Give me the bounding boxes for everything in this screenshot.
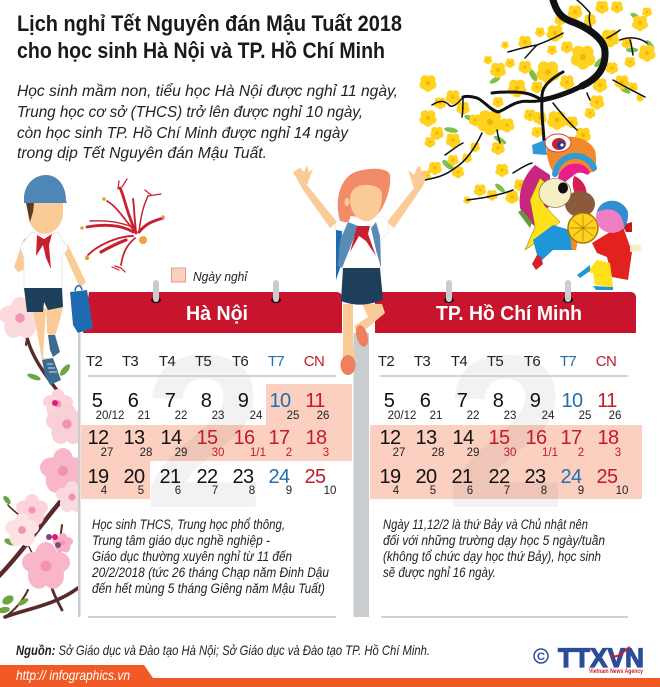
weekday row: T6 xyxy=(232,353,248,370)
panel: TP. Hồ Chí Minh calendar: 2 xyxy=(445,311,567,554)
illustration: cherry blossom branch xyxy=(0,297,78,619)
date grid: 9 xyxy=(578,485,584,497)
date grid: 11 xyxy=(597,390,617,412)
date grid: 13 xyxy=(415,427,437,449)
weekday row xyxy=(86,353,336,377)
date grid: 25 xyxy=(579,410,591,422)
note: TP. Hồ Chí Minh: Ngày 11,12/2 là thứ Bảy và Chủ nhật nên xyxy=(383,517,588,532)
calendar header: Hà Nội xyxy=(83,292,342,333)
weekday row: T2 xyxy=(378,353,394,370)
date grid: 11 xyxy=(305,390,325,412)
date grid: 21 xyxy=(138,410,150,422)
note: Hà Nội: Trung tâm giáo dục nghề nghiệp - xyxy=(92,533,270,548)
date grid: 14 xyxy=(452,427,474,449)
binder rings xyxy=(444,280,573,303)
note: Hà Nội: 20/2/2018 (tức 26 tháng Chạp năm Đinh Dậu xyxy=(91,565,329,580)
date grid: 9 xyxy=(530,390,541,412)
panel: Hà Nội calendar: 2 xyxy=(143,311,265,554)
date grid: 2 xyxy=(578,447,584,459)
date grid: 16 xyxy=(525,427,547,449)
date grid: 5 xyxy=(138,485,144,497)
date grid: 20/12 xyxy=(388,410,416,422)
date grid: 8 xyxy=(249,485,255,497)
footer bar xyxy=(0,665,660,687)
date grid: 21 xyxy=(430,410,442,422)
weekday row: T7 xyxy=(560,353,576,370)
date grid: 9 xyxy=(238,390,249,412)
date grid: 17 xyxy=(268,427,290,449)
date grid: 29 xyxy=(467,447,479,459)
date grid: 6 xyxy=(420,390,431,412)
date grid: 6 xyxy=(128,390,139,412)
weekday row: CN xyxy=(596,353,616,370)
date grid: 8 xyxy=(201,390,212,412)
weekday row: T6 xyxy=(524,353,540,370)
date grid: 19 xyxy=(379,466,401,488)
note: Hà Nội: Giáo dục thường xuyên nghỉ từ 11 đến xyxy=(92,549,292,564)
date grid: 28 xyxy=(432,447,444,459)
legend: holiday xyxy=(172,268,248,284)
date grid: 25 xyxy=(596,466,618,488)
date grid: 28 xyxy=(140,447,152,459)
date grid: 24 xyxy=(268,466,290,488)
weekday row: T2 xyxy=(86,353,102,370)
date grid: 29 xyxy=(175,447,187,459)
illustration: yellow apricot branch xyxy=(419,0,656,204)
date grid: 22 xyxy=(175,410,187,422)
date grid: 22 xyxy=(467,410,479,422)
date grid: 7 xyxy=(457,390,468,412)
date grid: 18 xyxy=(597,427,619,449)
panel: TP. Hồ Chí Minh calendar xyxy=(354,280,642,618)
weekday row: T7 xyxy=(268,353,284,370)
weekday row: CN xyxy=(304,353,324,370)
illustration: boy student xyxy=(14,175,93,385)
intro text: Học sinh mầm non, tiểu học Hà Nội được nghỉ 11 ngày, xyxy=(17,82,398,100)
calendar header: TP. Hồ Chí Minh: TP. Hồ Chí Minh xyxy=(436,303,582,325)
footer bar: http:// infographics.vn xyxy=(16,667,130,683)
weekday row: T3 xyxy=(122,353,138,370)
date grid: 20/12 xyxy=(96,410,124,422)
date grid: 3 xyxy=(323,447,329,459)
date grid: 23 xyxy=(504,410,516,422)
date grid: 16 xyxy=(233,427,255,449)
date grid: 13 xyxy=(123,427,145,449)
date grid: 8 xyxy=(493,390,504,412)
date grid: 20 xyxy=(123,466,145,488)
date grid: 22 xyxy=(196,466,218,488)
illustration: lion dance children xyxy=(518,134,642,290)
date grid: 19 xyxy=(87,466,109,488)
weekday row: T4 xyxy=(159,353,175,370)
date grid xyxy=(87,390,336,497)
date grid: 24 xyxy=(560,466,582,488)
date grid: 5 xyxy=(430,485,436,497)
weekday row: T5 xyxy=(195,353,211,370)
date grid: 6 xyxy=(467,485,473,497)
source line: Nguồn: Sở Giáo dục và Đào tạo Hà Nội; Sở Giáo dục và Đào tạo TP. Hồ Chí Minh. xyxy=(16,642,430,658)
calendar header: TP. Hồ Chí Minh xyxy=(375,292,636,333)
weekday row: T4 xyxy=(451,353,467,370)
date grid: 7 xyxy=(504,485,510,497)
intro text: còn học sinh TP. Hồ Chí Minh được nghỉ 14 ngày xyxy=(17,125,349,142)
intro text: Trung học cơ sở (THCS) trở lên được nghỉ 10 ngày, xyxy=(17,104,363,121)
note: Hà Nội: đến hết mùng 5 tháng Giêng năm Mậu Tuất) xyxy=(92,581,325,596)
date grid: 17 xyxy=(560,427,582,449)
date grid: 25 xyxy=(287,410,299,422)
date grid: 21 xyxy=(159,466,181,488)
date grid: 3 xyxy=(615,447,621,459)
date grid: 21 xyxy=(451,466,473,488)
date grid: 8 xyxy=(541,485,547,497)
weekday row: T3 xyxy=(414,353,430,370)
date grid: 23 xyxy=(232,466,254,488)
title xyxy=(17,11,402,63)
date grid: 6 xyxy=(175,485,181,497)
intro text: trong dịp Tết Nguyên đán Mậu Tuất. xyxy=(17,145,267,162)
date grid: 27 xyxy=(101,447,113,459)
note: TP. Hồ Chí Minh: sẽ được nghỉ 16 ngày. xyxy=(383,565,496,580)
date grid: 12 xyxy=(379,427,401,449)
date grid: 24 xyxy=(542,410,555,422)
date grid: 5 xyxy=(384,390,395,412)
date grid: 30 xyxy=(504,447,516,459)
date grid: 4 xyxy=(101,485,108,497)
date grid: 1/1 xyxy=(542,447,558,459)
weekday row: T5 xyxy=(487,353,503,370)
date grid: 7 xyxy=(165,390,176,412)
date grid: 15 xyxy=(196,427,218,449)
date grid: 23 xyxy=(524,466,546,488)
date grid: 9 xyxy=(286,485,292,497)
date grid: 5 xyxy=(92,390,103,412)
panel: Hà Nội calendar xyxy=(78,280,352,618)
date grid: 18 xyxy=(305,427,327,449)
date grid: 10 xyxy=(561,390,583,412)
date grid: 23 xyxy=(212,410,224,422)
weekday row xyxy=(378,353,628,377)
binder rings xyxy=(151,280,281,303)
date grid: 20 xyxy=(415,466,437,488)
logo: TTXVN: Vietnam News Agency xyxy=(589,669,644,675)
illustration: girl student xyxy=(293,165,428,375)
logo: TTXVN: C xyxy=(537,651,545,663)
title: cho học sinh Hà Nội và TP. Hồ Chí Minh xyxy=(17,38,385,63)
illustration: fireworks xyxy=(80,179,165,272)
date grid: 7 xyxy=(212,485,218,497)
date grid: 26 xyxy=(609,410,621,422)
logo: TTXVN: TTXVN xyxy=(558,643,644,673)
date grid: 22 xyxy=(488,466,510,488)
legend: holiday: Ngày nghỉ xyxy=(193,269,248,284)
date grid: 24 xyxy=(250,410,263,422)
date grid xyxy=(379,390,628,497)
note: TP. Hồ Chí Minh: (không tổ chức dạy học thứ Bảy), học sinh xyxy=(383,549,601,564)
intro text xyxy=(17,82,398,162)
date grid: 2 xyxy=(286,447,292,459)
date grid: 10 xyxy=(269,390,291,412)
date grid: 25 xyxy=(304,466,326,488)
date grid: 26 xyxy=(317,410,329,422)
date grid: 10 xyxy=(324,485,336,497)
date grid: 15 xyxy=(488,427,510,449)
date grid: 10 xyxy=(616,485,628,497)
date grid: 1/1 xyxy=(250,447,266,459)
date grid: 14 xyxy=(160,427,182,449)
date grid: 4 xyxy=(393,485,400,497)
date grid: 27 xyxy=(393,447,405,459)
title: Lịch nghỉ Tết Nguyên đán Mậu Tuất 2018 xyxy=(17,11,402,36)
date grid: 12 xyxy=(87,427,109,449)
note: TP. Hồ Chí Minh: đối với những trường dạy học 5 ngày/tuần xyxy=(383,533,605,548)
note: Hà Nội: Học sinh THCS, Trung học phổ thông, xyxy=(92,517,285,532)
date grid: 30 xyxy=(212,447,224,459)
note: TP. Hồ Chí Minh xyxy=(383,517,605,580)
calendar header: Hà Nội: Hà Nội xyxy=(186,303,248,325)
note: Hà Nội xyxy=(91,517,329,596)
